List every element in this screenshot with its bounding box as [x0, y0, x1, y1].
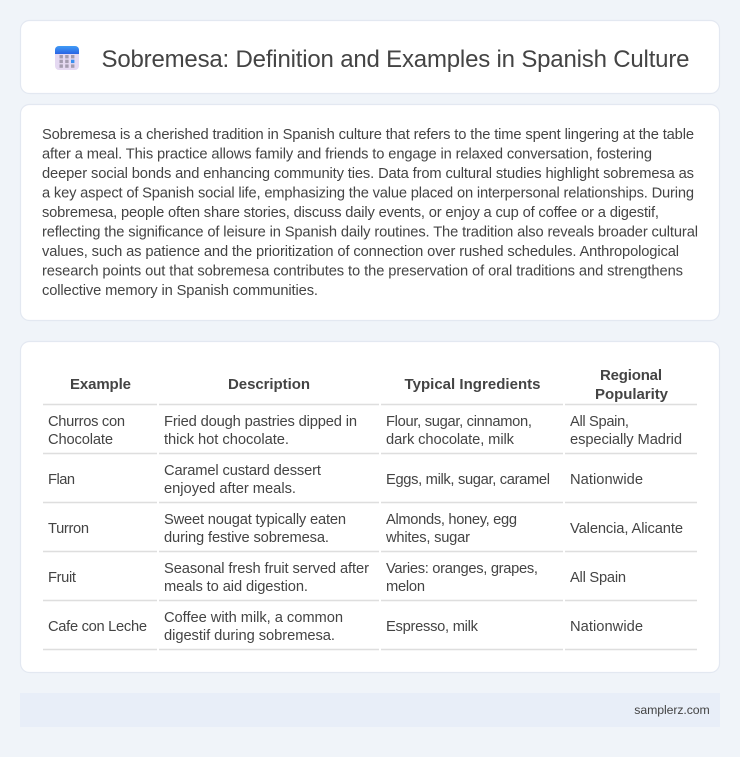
- table row: Cafe con Leche: Cafe con Leche: [48, 619, 147, 635]
- table row: Fruit: melon: [386, 579, 425, 595]
- footer: [20, 693, 720, 727]
- table header row: [70, 367, 669, 403]
- table row: Churros con Chocolate: Flour, sugar, cinnamon,: [386, 414, 532, 430]
- text block: introduction paragraph: a key aspect of Spanish social life, emphasizing the value placed on interpersonal relationships. During: [42, 186, 694, 202]
- table row: Churros con Chocolate: [48, 414, 682, 448]
- table row: Cafe con Leche: Espresso, milk: [386, 619, 479, 635]
- panel: examples table: [20, 342, 720, 672]
- table row: Churros con Chocolate: Fried dough pastries dipped in: [164, 414, 357, 430]
- table row: Churros con Chocolate: Chocolate: [48, 432, 113, 448]
- panel: header: [20, 20, 720, 94]
- text block: introduction paragraph: Sobremesa is a cherished tradition in Spanish culture that refers to the time spent lingering at the table: [42, 127, 694, 143]
- table row: Cafe con Leche: Coffee with milk, a common: [164, 610, 343, 626]
- table row: Fruit: All Spain: [570, 570, 626, 586]
- table row: Cafe con Leche: digestif during sobremesa.: [164, 628, 335, 644]
- footer credit: samplerz.com: [634, 703, 710, 717]
- title: Sobremesa: Definition and Examples in Spanish Culture: [102, 46, 690, 73]
- table row: Fruit: Seasonal fresh fruit served after: [164, 561, 369, 577]
- table header row: Popularity: [595, 386, 669, 403]
- text block: introduction paragraph: reflecting the significance of leisure in Spanish daily routines. The tradition also reveals broader cultural: [42, 224, 698, 240]
- table row: Fruit: Varies: oranges, grapes,: [386, 561, 538, 577]
- table row: Fruit: meals to aid digestion.: [164, 579, 308, 595]
- table header row: Typical Ingredients: [404, 376, 540, 393]
- table row: Fruit: [48, 561, 626, 595]
- table header row: Regional: [600, 367, 662, 384]
- table row: Flan: Nationwide: [570, 472, 643, 488]
- table row: Turron: Valencia, Alicante: [570, 521, 683, 537]
- table row: Turron: Almonds, honey, egg: [386, 512, 517, 528]
- table row: Flan: Flan: [48, 472, 75, 488]
- table row: Flan: [48, 463, 643, 497]
- icon: calendar: [55, 46, 79, 70]
- table row: Fruit: Fruit: [48, 570, 76, 586]
- table row: Turron: Turron: [48, 521, 89, 537]
- table header row: Description: [228, 376, 310, 393]
- text block: introduction paragraph: research points out that sobremesa contributes to the preservation of oral traditions and strengthens: [42, 264, 683, 280]
- text block: introduction paragraph: after a meal. This practice allows family and friends to engage in relaxed conversation, fostering: [42, 146, 652, 162]
- table row: Churros con Chocolate: especially Madrid: [570, 432, 682, 448]
- text block: introduction paragraph: [42, 127, 698, 299]
- table row: Cafe con Leche: Nationwide: [570, 619, 643, 635]
- text block: introduction paragraph: collective memory in Spanish communities.: [42, 283, 318, 299]
- panel: introduction: [20, 104, 720, 320]
- table row: Churros con Chocolate: All Spain,: [570, 414, 629, 430]
- table row: Churros con Chocolate: Churros con: [48, 414, 125, 430]
- table row: Turron: Sweet nougat typically eaten: [164, 512, 346, 528]
- text block: introduction paragraph: values, such as patience and the prioritization of connection over rushed schedules. Anthropological: [42, 244, 679, 260]
- table row: Flan: Caramel custard dessert: [164, 463, 321, 479]
- table row: Churros con Chocolate: dark chocolate, milk: [386, 432, 515, 448]
- text block: introduction paragraph: sobremesa, people often share stories, discuss daily events, or enjoy a cup of coffee or a digestif,: [42, 205, 659, 221]
- table row: Flan: enjoyed after meals.: [164, 481, 296, 497]
- table row: Turron: whites, sugar: [385, 530, 470, 546]
- table row: Cafe con Leche: [48, 610, 643, 644]
- table row: Turron: [48, 512, 683, 546]
- table row: Churros con Chocolate: thick hot chocolate.: [164, 432, 289, 448]
- table row: Turron: during festive sobremesa.: [164, 530, 329, 546]
- text block: introduction paragraph: deeper social bonds and enhancing community ties. Data from cultural studies highlight sobremesa as: [42, 166, 694, 182]
- table row: Flan: Eggs, milk, sugar, caramel: [386, 472, 550, 488]
- table header row: Example: [70, 376, 131, 393]
